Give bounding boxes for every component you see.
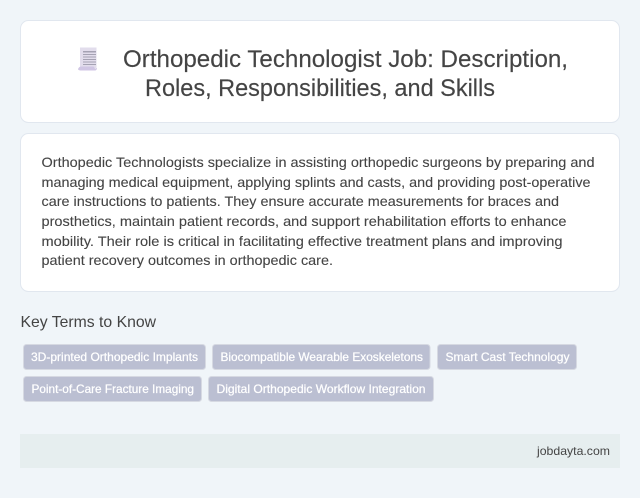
tag: Digital Orthopedic Workflow Integration: Digital Orthopedic Workflow Integration xyxy=(216,382,426,396)
description text: mobility. Their role is critical in facilitating effective treatment plans and improving xyxy=(42,233,562,249)
description text: managing medical equipment, applying splints and casts, and providing post-operative xyxy=(42,174,591,190)
tag: 3D-printed Orthopedic Implants: 3D-printed Orthopedic Implants xyxy=(31,350,198,364)
title xyxy=(123,46,568,102)
description text: patient recovery outcomes in orthopedic care. xyxy=(42,252,333,268)
tag: Smart Cast Technology: Smart Cast Technology xyxy=(446,350,570,364)
icon: document scroll xyxy=(78,48,97,70)
title: Roles, Responsibilities, and Skills xyxy=(145,75,495,102)
footer: jobdayta.com xyxy=(536,444,610,458)
tag: Digital Orthopedic Workflow Integration xyxy=(208,376,434,402)
heading: key terms: Key Terms to Know xyxy=(20,314,156,331)
tag: Point-of-Care Fracture Imaging xyxy=(24,376,202,402)
description text: Orthopedic Technologists specialize in assisting orthopedic surgeons by preparing and xyxy=(42,154,594,170)
tag: Biocompatible Wearable Exoskeletons: Biocompatible Wearable Exoskeletons xyxy=(220,350,423,364)
panel: header xyxy=(20,20,620,122)
footer xyxy=(20,434,620,468)
tag: 3D-printed Orthopedic Implants xyxy=(24,344,206,370)
tag: Point-of-Care Fracture Imaging: Point-of-Care Fracture Imaging xyxy=(32,382,194,396)
panel: description xyxy=(20,134,620,292)
description text: care instructions to patients. They ensure accurate measurements for braces and xyxy=(42,193,559,209)
title: Orthopedic Technologist Job: Description, xyxy=(123,46,568,73)
tag: Smart Cast Technology xyxy=(438,344,576,370)
description text: prosthetics, maintain patient records, and support rehabilitation efforts to enhance xyxy=(42,213,567,229)
tag: Biocompatible Wearable Exoskeletons xyxy=(212,344,430,370)
description text xyxy=(42,154,594,268)
